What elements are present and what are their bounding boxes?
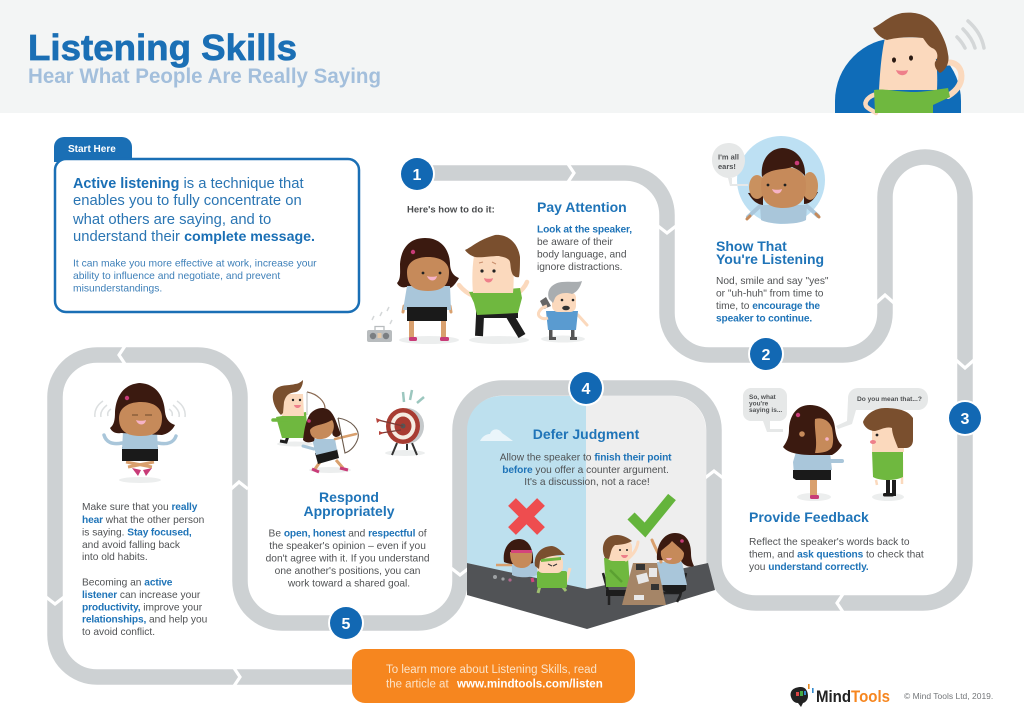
speech bubble: do you mean that: Do you mean that...? [857,396,922,403]
step 2 text: or "uh-huh" from time to [716,288,824,300]
man archer [273,380,325,446]
intro detail: misunderstandings. [73,284,162,294]
header band [0,0,1024,113]
step 1 marker [399,156,435,192]
intro statement: enables you to fully concentrate on [73,193,302,209]
step 5 heading: Appropriately [303,503,395,519]
step 4 text: Allow the speaker to finish their point [500,452,671,464]
step 4 text: before you offer a counter argument. [502,465,669,476]
illustration: man seen from side [863,408,913,501]
step 2 text: speaker to continue. [716,314,812,324]
closing text: into old habits. [82,552,148,563]
illustration: girl seen from side [783,405,842,501]
panel: defer judgment [467,396,715,629]
step 1 heading: Pay Attention [537,199,627,215]
subtitle: Hear What People Are Really Saying [28,65,381,88]
speech bubble: I'm all ears [712,143,748,186]
step 2 text: Nod, smile and say "yes" [716,276,829,287]
step 5 marker: 5 [342,616,351,633]
icon: cloud [480,429,513,441]
start here tab [54,137,132,162]
step 5 text: don't agree with it. If you understand [266,554,430,564]
call to action: the article at [386,678,449,690]
grey half [586,396,706,590]
icon: green tick [631,497,672,530]
step 1 text: body language, and [537,250,627,260]
step 1 marker: 1 [413,167,422,184]
intro detail: ability to influence and negotiate, and prevent [73,271,280,282]
step 4 heading: Defer Judgment [533,426,640,442]
step 2 heading: Show That [716,238,787,254]
panel: start here [54,137,359,312]
illustration: meditating girl [95,383,185,483]
step 5 text: Be open, honest and respectful of [269,528,427,540]
step 1 text: ignore distractions. [537,262,623,273]
call to action: www.mindtools.com/listen [456,678,603,690]
step 3 text: you understand correctly. [749,562,869,573]
closing text: productivity, improve your [82,602,202,614]
illustration: arguing pair [493,539,570,593]
speech bubble: so what you're saying: So, what [749,394,777,401]
step 4 text: It's a discussion, not a race! [524,477,650,488]
closing text: Becoming an active [82,578,172,588]
intro statement: what others are saying, and to [72,212,271,228]
step 5 heading: Respond [319,489,379,505]
intro statement: Active listening is a technique that [73,176,304,192]
step 1 text: be aware of their [537,237,613,248]
illustration: two archers [273,380,358,473]
speech bubble: I'm all ears: ears! [718,162,736,171]
step 3 text: Reflect the speaker's words back to [749,537,910,548]
start here tab: Start Here [68,144,116,155]
speech bubble: do you mean that [836,388,928,429]
closing text: hear what the other person [82,515,204,526]
copyright: © Mind Tools Ltd, 2019. [904,691,993,701]
intro box [55,159,359,312]
illustration: distracted man [459,235,529,344]
call to action [352,649,635,703]
step 2 marker: 2 [762,347,771,364]
closing text: listener can increase your [82,590,200,601]
call to action: To learn more about Listening Skills, read [386,664,597,676]
closing text: Make sure that you really [82,502,197,513]
step 3 marker: 3 [961,411,970,428]
logo: MindTools: MindTools [816,688,890,706]
icon: man cupping his ear in the header [835,13,984,113]
step 5 text: one another's positions, you can [275,566,420,577]
step 1 text: Look at the speaker, [537,224,632,236]
title: Listening Skills [28,27,297,68]
step 4 marker [568,370,604,406]
icon: red cross [512,502,541,531]
step 3 marker [947,400,983,436]
illustration: listening girl [397,238,459,344]
step 2 marker [748,336,784,372]
speech bubble: so what you're saying [743,388,787,432]
step 3 heading: Provide Feedback [749,509,869,525]
illustration: old man on phone [538,281,587,342]
closing text: is saying. Stay focused, [82,528,192,538]
step 4 marker: 4 [582,381,591,398]
icon: target with arrows [376,390,425,456]
closing text: relationships, and help you [82,614,207,626]
illustration: pair talking at table [603,533,694,605]
step 5 text: work toward a shared goal. [287,578,410,590]
intro statement: understand their complete message. [73,229,315,245]
step 5 text: the speaker's opinion – even if you [269,541,426,552]
speech bubble: I'm all ears: I'm all [718,152,739,162]
logo: MindTools [791,684,890,707]
speech bubble: so what you're saying: saying is... [749,407,782,414]
illustration: girl with big ears [737,136,825,224]
floor [467,563,715,629]
closing text: and avoid falling back [82,540,181,551]
step 5 marker [328,605,364,641]
woman archer [303,408,358,473]
speech bubble: so what you're saying: you're [749,400,769,408]
closing text: to avoid conflict. [82,627,155,638]
step 3 text: them, and ask questions to check that [749,550,924,560]
blue half [467,396,586,590]
winding path [55,157,965,677]
intro detail: It can make you more effective at work, increase your [73,258,317,270]
step 2 heading: You're Listening [716,251,824,267]
icon: boombox with music notes [367,307,392,342]
how to label: Here's how to do it: [407,204,495,216]
step 2 text: time, to encourage the [716,301,820,312]
